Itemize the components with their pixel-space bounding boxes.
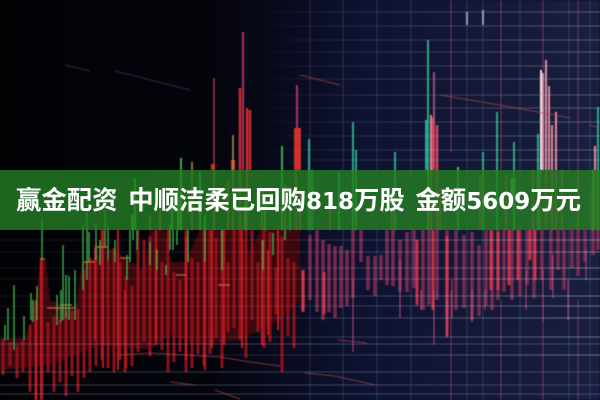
vertical grid lines [310,0,590,400]
lower right pink candles [303,230,598,352]
lower red candles [0,230,300,400]
headline text: 赢金配资 中顺洁柔已回购818万股 金额5609万元 [16,187,581,215]
upper candles [181,10,598,170]
bars passing behind the title band [132,167,598,230]
green title band [0,170,600,230]
green candle wicks [5,210,285,350]
